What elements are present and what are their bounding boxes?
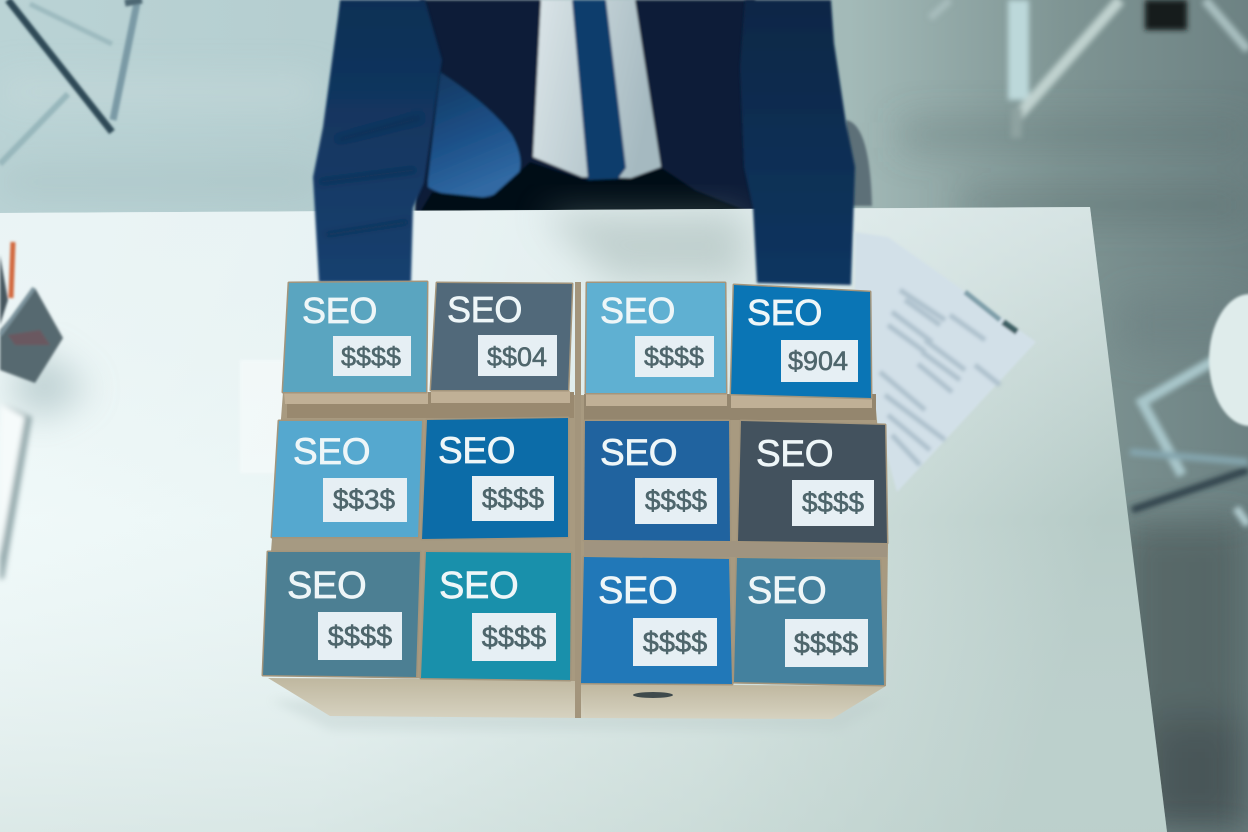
person torso behind desk xyxy=(415,0,770,212)
box 1: $$$$ xyxy=(341,342,401,372)
round white stool xyxy=(1209,294,1248,426)
box 2 xyxy=(431,283,572,390)
box 5: $$3$ xyxy=(333,484,396,515)
box 10: $$$$ xyxy=(482,622,546,654)
box 4: $904 xyxy=(788,346,848,376)
tablet at left edge xyxy=(0,403,32,580)
box 8: SEO xyxy=(756,433,833,474)
box 4: SEO xyxy=(747,292,822,333)
box 4 xyxy=(731,285,871,398)
box 2: SEO xyxy=(447,289,522,330)
shirt xyxy=(533,0,661,178)
pencil holder xyxy=(0,242,90,420)
shadow under person on desk xyxy=(540,212,745,280)
box 10: SEO xyxy=(439,565,518,607)
tie xyxy=(572,0,626,195)
box 11: SEO xyxy=(598,570,677,612)
box 1: SEO xyxy=(302,290,377,331)
box 2: $$04 xyxy=(487,342,547,372)
box 6 xyxy=(422,418,568,539)
left floor furniture legs xyxy=(0,0,142,164)
right floor chair legs xyxy=(930,0,1248,525)
person sleeves over desk xyxy=(313,0,855,285)
box 11: $$$$ xyxy=(643,627,707,659)
box 12: SEO xyxy=(747,570,826,612)
box 10 xyxy=(421,552,571,680)
cardboard stack xyxy=(262,282,888,719)
box 9: SEO xyxy=(287,565,366,607)
box 3 xyxy=(586,283,726,393)
box 6: SEO xyxy=(438,430,515,471)
box 6: $$$$ xyxy=(482,483,545,514)
chair back xyxy=(845,120,872,206)
shadow around boxes xyxy=(270,700,890,730)
jacket body xyxy=(415,0,770,212)
box 9: $$$$ xyxy=(328,621,392,653)
jacket pocket flap highlight xyxy=(428,72,520,198)
box 8 xyxy=(738,421,887,543)
box 8: $$$$ xyxy=(802,487,865,518)
box 7 xyxy=(584,421,730,541)
box 7: $$$$ xyxy=(645,485,708,516)
box 11 xyxy=(581,557,732,684)
box 9 xyxy=(263,552,420,677)
faded sheet left of stack xyxy=(240,360,290,473)
box 3: $$$$ xyxy=(644,342,704,372)
box 12: $$$$ xyxy=(794,628,858,660)
box 5: SEO xyxy=(293,431,370,472)
white desk xyxy=(0,207,1167,832)
lap xyxy=(420,162,750,212)
document on desk xyxy=(855,232,1036,492)
box 7: SEO xyxy=(600,432,677,473)
box 1 xyxy=(283,282,427,392)
box 12 xyxy=(734,558,884,685)
box 3: SEO xyxy=(600,290,675,331)
box 5 xyxy=(272,421,422,537)
